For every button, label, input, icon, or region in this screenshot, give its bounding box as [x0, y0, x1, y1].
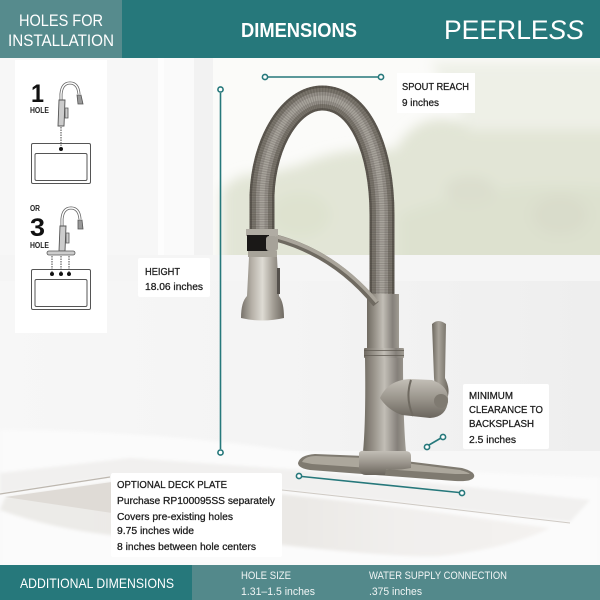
tab: holes for installation: HOLES FOR	[19, 11, 103, 30]
arrow: spout reach	[262, 74, 384, 80]
arrow: height	[218, 87, 223, 455]
callout: optional deck plate	[111, 473, 282, 557]
panel: holes for installation	[15, 60, 107, 333]
callout: height: 18.06 inches	[145, 281, 203, 293]
callout: spout reach	[397, 73, 475, 113]
icon: one hole: 1	[31, 80, 44, 108]
tab: holes for installation: INSTALLATION	[8, 31, 114, 50]
callout: optional deck plate: 8 inches between hole centers	[117, 541, 256, 553]
callout: minimum clearance	[463, 384, 549, 449]
callout: spout reach: SPOUT REACH	[402, 81, 469, 93]
callout: height	[138, 258, 210, 297]
callout: optional deck plate: OPTIONAL DECK PLATE	[117, 479, 227, 491]
faucet: lever	[432, 321, 449, 396]
faucet: body	[363, 294, 406, 452]
tab: additional dimensions	[0, 565, 192, 600]
text: hole size: HOLE SIZE	[241, 570, 291, 582]
icon: three holes: 3	[30, 214, 45, 242]
bottom bar	[0, 565, 600, 600]
top bar	[0, 0, 600, 58]
faucet: base ring	[359, 451, 411, 475]
callout: minimum clearance: MINIMUM	[469, 390, 513, 402]
text: hole size: 1.31–1.5 inches	[241, 586, 315, 598]
text: water supply connection	[369, 570, 507, 598]
callout: minimum clearance: CLEARANCE TO	[469, 404, 543, 416]
callout: optional deck plate: Purchase RP100095SS separately	[117, 495, 276, 507]
tab: additional dimensions: ADDITIONAL DIMENSIONS	[20, 575, 174, 591]
icon: three holes: HOLE	[30, 241, 50, 250]
faucet: pull-down arm	[276, 236, 377, 304]
icon: three holes: OR	[30, 204, 40, 213]
arrow: deck plate width	[296, 473, 465, 496]
text: hole size	[241, 570, 315, 598]
faucet: deck plate	[298, 454, 474, 481]
text: water supply connection: .375 inches	[369, 586, 422, 598]
faucet: spray head	[241, 229, 284, 320]
icon: one hole: HOLE	[30, 106, 50, 115]
faucet: ribbed gooseneck	[262, 98, 382, 295]
callout: optional deck plate: Covers pre-existing holes	[117, 511, 233, 523]
icon: three holes	[30, 204, 90, 310]
callout: height: HEIGHT	[145, 266, 181, 278]
faucet: handle hub	[380, 379, 448, 418]
icon: one hole	[30, 80, 90, 184]
logo: Peerless: PEERLESS	[444, 15, 584, 45]
text: water supply connection: WATER SUPPLY CONNECTION	[369, 570, 507, 582]
callout: optional deck plate: 9.75 inches wide	[117, 525, 194, 537]
callout: spout reach: 9 inches	[402, 97, 439, 109]
callout: minimum clearance: BACKSPLASH	[469, 418, 534, 430]
arrow: clearance	[424, 434, 446, 450]
tab: holes for installation	[0, 0, 122, 58]
callout: minimum clearance: 2.5 inches	[469, 434, 516, 446]
faucet	[241, 98, 474, 481]
heading: dimensions: DIMENSIONS	[241, 20, 357, 42]
